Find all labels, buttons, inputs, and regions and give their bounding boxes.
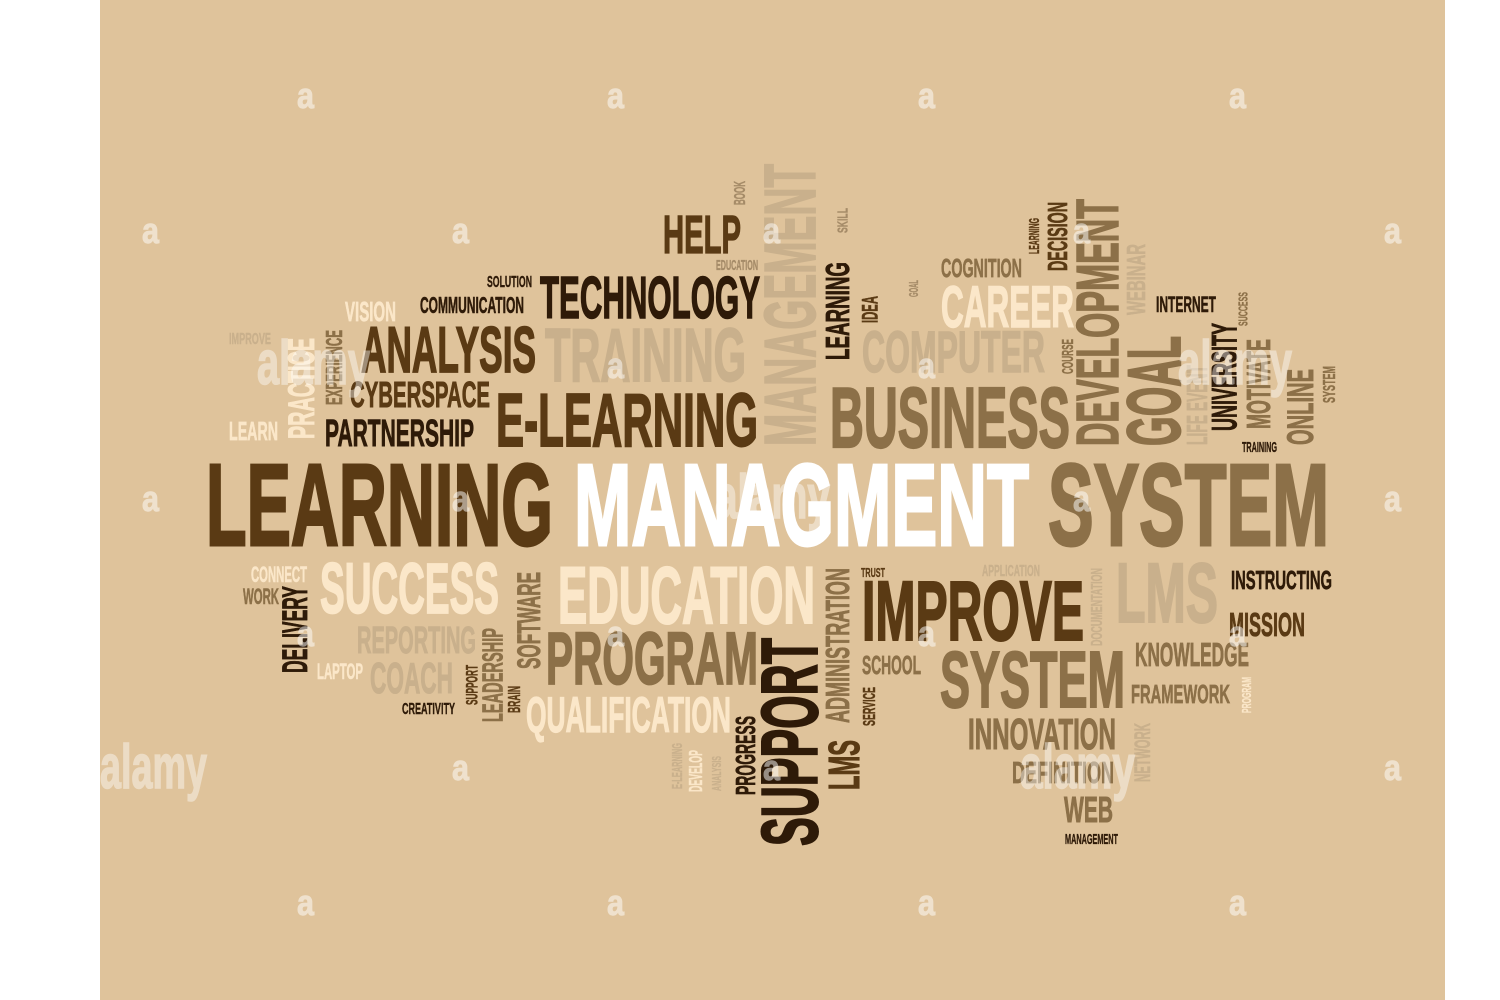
watermark: alamy right: alamy	[1178, 329, 1292, 398]
small watermark grid: a	[297, 613, 315, 654]
word: improve: IMPROVE	[862, 564, 1084, 658]
word: program small: PROGRAM	[1239, 677, 1254, 713]
word: instructing: INSTRUCTING	[1231, 565, 1332, 595]
small watermark grid: a	[607, 75, 625, 116]
word: lms vertical: LMS	[821, 740, 869, 790]
vertical words above title: GOAL	[906, 280, 921, 297]
small watermark grid: a	[1384, 210, 1402, 251]
small watermark grid: a	[142, 210, 160, 251]
title word: learning: LEARNING	[206, 440, 553, 570]
word: online: ONLINE	[1280, 369, 1321, 445]
small watermark grid: a	[1384, 478, 1402, 519]
word: solution: SOLUTION	[487, 274, 532, 291]
small watermark grid: a	[763, 210, 781, 251]
word: practice: PRACTICE	[281, 338, 322, 439]
word: internet: INTERNET	[1156, 292, 1216, 317]
word: communication: COMMUNICATION	[420, 292, 524, 318]
word: qualification: QUALIFICATION	[526, 687, 731, 743]
word: business: BUSINESS	[830, 371, 1070, 466]
word: program: PROGRAM	[546, 617, 758, 700]
small watermark grid: a	[1073, 210, 1091, 251]
word: e-learning small: E-LEARNING	[670, 743, 686, 789]
word: system: SYSTEM	[940, 635, 1125, 724]
word: coach: COACH	[370, 655, 453, 703]
small watermark grid: a	[918, 882, 936, 923]
small watermark grid: a	[1384, 747, 1402, 788]
word: course: COURSE	[1060, 339, 1077, 374]
word: web: WEB	[1064, 789, 1113, 830]
word cloud infographic: TRAINING	[1242, 440, 1277, 456]
word: leadership: LEADERSHIP	[476, 628, 508, 722]
small watermark grid: a	[1229, 75, 1247, 116]
vertical words below title	[276, 568, 1254, 846]
word: career: CAREER	[941, 275, 1074, 340]
word: software: SOFTWARE	[510, 572, 547, 669]
small watermark grid: a	[452, 210, 470, 251]
small watermark grid: a	[918, 613, 936, 654]
word: goal: GOAL	[1112, 336, 1196, 446]
word: analysis small: ANALYSIS	[709, 756, 724, 791]
word: computer: COMPUTER	[862, 320, 1045, 385]
word: e-learning: E-LEARNING	[496, 378, 758, 462]
word: education: EDUCATION	[558, 551, 815, 641]
small watermark grid: a	[1073, 478, 1091, 519]
word: learning vertical: LEARNING	[820, 262, 857, 360]
word: progress: PROGRESS	[730, 716, 761, 795]
word: help: HELP	[663, 205, 741, 265]
word: vision: VISION	[345, 296, 396, 327]
word: lms: LMS	[1116, 546, 1218, 640]
word: reporting: REPORTING	[357, 619, 476, 661]
word: decision: DECISION	[1042, 202, 1073, 271]
word: cyberspace: CYBERSPACE	[350, 374, 490, 415]
word: cognition: COGNITION	[941, 253, 1022, 283]
word: framework: FRAMEWORK	[1131, 679, 1230, 709]
small watermark grid: a	[607, 882, 625, 923]
word: service: SERVICE	[859, 687, 879, 726]
word: idea: IDEA	[858, 296, 882, 323]
vertical words above title	[281, 164, 1339, 446]
word: book: BOOK	[732, 181, 749, 205]
word: laptop: LAPTOP	[317, 659, 363, 684]
word: development: DEVELOPMENT	[1064, 199, 1131, 446]
word: support small: SUPPORT	[462, 665, 482, 705]
word: webinar: WEBINAR	[1121, 244, 1151, 315]
word: technology: TECHNOLOGY	[540, 264, 760, 331]
word: knowledge: KNOWLEDGE	[1135, 637, 1249, 674]
word: success small: SUCCESS	[1236, 292, 1250, 326]
small watermark grid: a	[452, 747, 470, 788]
word: skill: SKILL	[834, 208, 852, 233]
word: system small: SYSTEM	[1319, 366, 1339, 403]
word: mission: MISSION	[1229, 607, 1305, 644]
vertical words below title: DEVELOP	[686, 750, 706, 792]
small watermark grid: a	[763, 747, 781, 788]
vertical words below title: BRAIN	[504, 686, 524, 713]
horizontal words above title: EDUCATION	[716, 258, 758, 274]
small watermark grid: a	[452, 478, 470, 519]
horizontal words below title	[243, 546, 1332, 848]
vertical words above title: LEARNING	[1027, 218, 1043, 254]
word: work: WORK	[243, 584, 279, 609]
vertical words above title: LIFE EVENT	[1182, 365, 1214, 445]
word: school: SCHOOL	[862, 650, 921, 680]
horizontal words above title	[229, 205, 1277, 466]
small watermark grid: a	[1229, 882, 1247, 923]
watermark: alamy centre: alamy	[715, 463, 830, 532]
watermark: alamy lower left: alamy	[100, 733, 207, 802]
word: training: TRAINING	[545, 313, 746, 397]
small watermark grid	[142, 75, 1402, 923]
word: connect: CONNECT	[251, 562, 307, 587]
word: innovation: INNOVATION	[968, 711, 1116, 759]
small watermark grid: a	[297, 75, 315, 116]
small watermark grid: a	[918, 75, 936, 116]
word: definition: DEFINITION	[1012, 756, 1114, 790]
small watermark grid: a	[918, 345, 936, 386]
word: motivate: MOTIVATE	[1241, 339, 1278, 429]
word: partnership: PARTNERSHIP	[325, 413, 474, 455]
word: experience: EXPERIENCE	[321, 330, 347, 405]
word: management small: MANAGEMENT	[1065, 832, 1118, 848]
word: success: SUCCESS	[320, 550, 499, 629]
word: administration: ADMINISTRATION	[820, 568, 857, 723]
small watermark grid: a	[607, 613, 625, 654]
word: university: UNIVERSITY	[1206, 323, 1244, 431]
large watermarks	[100, 329, 1292, 802]
word: creativity: CREATIVITY	[402, 701, 455, 718]
word: improve small: IMPROVE	[229, 331, 271, 348]
word: network: NETWORK	[1130, 723, 1155, 782]
main title	[206, 440, 1329, 570]
word: learn: LEARN	[229, 416, 278, 446]
watermark: alamy left: alamy	[257, 329, 370, 398]
word: application: APPLICATION	[982, 563, 1040, 580]
small watermark grid: a	[297, 882, 315, 923]
word: trust: TRUST	[861, 565, 885, 580]
word: documentation: DOCUMENTATION	[1089, 568, 1106, 646]
word: analysis: ANALYSIS	[361, 313, 536, 386]
small watermark grid: a	[1229, 613, 1247, 654]
small watermark grid: a	[142, 478, 160, 519]
watermark: alamy lower right: alamy	[1020, 733, 1135, 802]
small watermark grid: a	[607, 345, 625, 386]
title word: managment: MANAGMENT	[574, 440, 1029, 570]
word: delivery: DELIVERY	[276, 586, 315, 673]
word: support: SUPPORT	[745, 638, 834, 846]
